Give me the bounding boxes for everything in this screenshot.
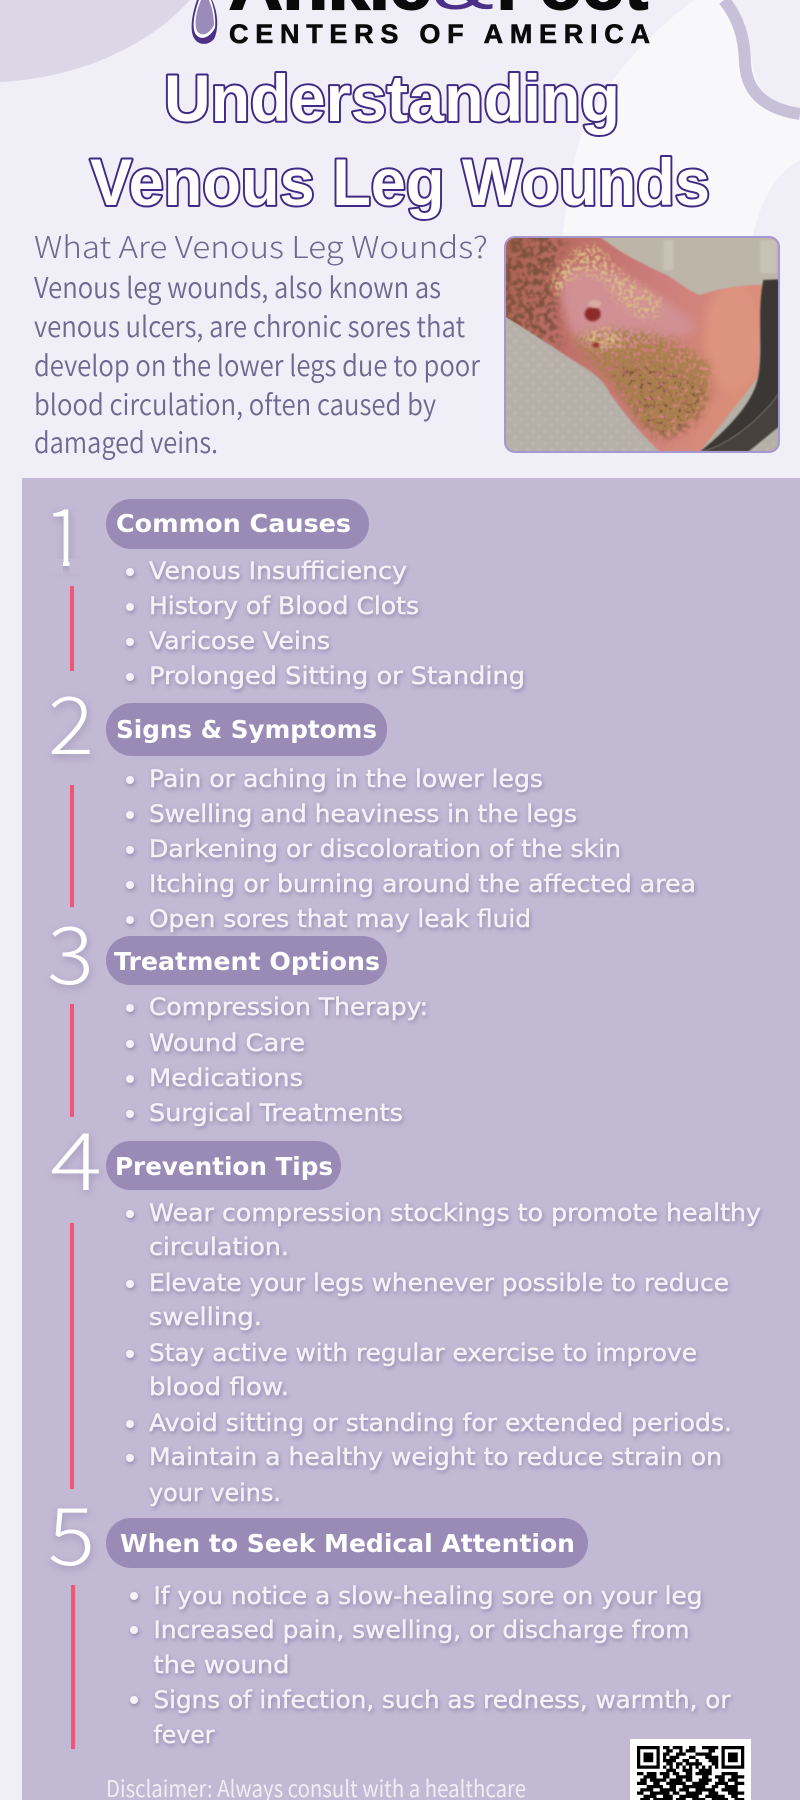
photo: venous ulcer on lower leg xyxy=(500,230,780,453)
logo wordmark xyxy=(229,0,650,49)
list 4: swelling. xyxy=(149,1303,262,1331)
title: Venous Leg Wounds xyxy=(90,145,710,219)
list 4 xyxy=(126,1199,761,1507)
list 2: Itching or burning around the affected area xyxy=(149,870,696,898)
section 4: prevention tips xyxy=(50,1098,761,1507)
list 4: Wear compression stockings to promote healthy xyxy=(149,1199,761,1227)
list 4: circulation. xyxy=(149,1233,289,1261)
shoe xyxy=(700,279,779,452)
list 1: Varicose Veins xyxy=(149,627,330,655)
list 3: Surgical Treatments xyxy=(149,1099,403,1127)
title: Understanding xyxy=(164,61,620,135)
list 4: Avoid sitting or standing for extended periods. xyxy=(149,1409,732,1437)
intro paragraph: venous ulcers, are chronic sores that xyxy=(34,305,465,346)
wound xyxy=(585,307,601,321)
list 3: Wound Care xyxy=(149,1029,305,1057)
list 5: fever xyxy=(154,1721,215,1749)
list 5 xyxy=(130,1582,731,1749)
section 3: treatment options xyxy=(47,892,428,1127)
connector line 2 xyxy=(70,785,74,907)
number 1: 1 xyxy=(43,474,86,590)
list 3: Compression Therapy: xyxy=(149,993,428,1021)
number 3: 3 xyxy=(47,892,94,1008)
intro paragraph xyxy=(34,266,480,462)
heading pill 5: When to Seek Medical Attention xyxy=(120,1529,575,1558)
logo xyxy=(192,0,650,49)
section 5: when to seek medical attention xyxy=(48,1473,731,1749)
decorative background shapes xyxy=(0,0,800,240)
list 4: your veins. xyxy=(149,1479,281,1507)
intro paragraph: blood circulation, often caused by xyxy=(34,383,436,424)
heading pill 3 xyxy=(106,936,387,985)
number 5: 5 xyxy=(48,1473,95,1589)
list 1: History of Blood Clots xyxy=(149,592,419,620)
list 2 xyxy=(126,765,696,933)
list 4: blood flow. xyxy=(149,1373,289,1401)
list 5: Signs of infection, such as redness, warmth, or xyxy=(154,1686,731,1714)
list 2: Swelling and heaviness in the legs xyxy=(149,800,577,828)
heading pill 1 xyxy=(106,499,369,549)
list 4: Stay active with regular exercise to improve xyxy=(149,1339,697,1367)
list 5: the wound xyxy=(154,1651,290,1679)
heading pill 2 xyxy=(106,703,387,756)
section 2: signs and symptoms xyxy=(48,662,696,933)
connector line 5 xyxy=(71,1585,75,1749)
dark speckle texture xyxy=(506,238,568,348)
heading pill 5 xyxy=(106,1518,588,1568)
icon: logo foot mark xyxy=(192,0,217,44)
leg shape xyxy=(506,237,763,452)
heading pill 4: Prevention Tips xyxy=(115,1152,333,1181)
heading pill 4 xyxy=(106,1141,341,1190)
heading pill 2: Signs & Symptoms xyxy=(116,715,377,744)
list 2: Pain or aching in the lower legs xyxy=(149,765,543,793)
pale crust texture xyxy=(550,245,662,320)
list 2: Open sores that may leak fluid xyxy=(149,905,531,933)
title xyxy=(90,61,710,219)
intro heading: What Are Venous Leg Wounds? xyxy=(34,223,488,267)
connector line 3 xyxy=(70,1004,74,1117)
list 1: Venous Insufficiency xyxy=(149,557,407,585)
intro paragraph: develop on the lower legs due to poor xyxy=(34,344,480,385)
logo wordmark: CENTERS OF AMERICA xyxy=(229,19,650,49)
list 4: Maintain a healthy weight to reduce strain on xyxy=(149,1443,722,1471)
heading pill 1: Common Causes xyxy=(116,509,351,538)
number 4: 4 xyxy=(50,1098,102,1214)
brown crust texture xyxy=(570,329,708,433)
list 2: Darkening or discoloration of the skin xyxy=(149,835,621,863)
list 5: If you notice a slow-healing sore on your leg xyxy=(154,1582,702,1610)
intro paragraph: damaged veins. xyxy=(34,421,218,462)
QR code xyxy=(630,1739,751,1800)
connector line 1 xyxy=(70,586,74,671)
panel: main content xyxy=(22,478,800,1800)
connector line 4 xyxy=(70,1223,74,1489)
list 4: Elevate your legs whenever possible to reduce xyxy=(149,1269,729,1297)
intro paragraph: Venous leg wounds, also known as xyxy=(34,266,441,307)
list 5: Increased pain, swelling, or discharge from xyxy=(154,1616,690,1644)
list 1: Prolonged Sitting or Standing xyxy=(149,662,525,690)
list 1 xyxy=(126,557,525,690)
section 1: common causes xyxy=(36,474,525,690)
number 2: 2 xyxy=(48,662,94,778)
list 3 xyxy=(126,993,428,1127)
list 3: Medications xyxy=(149,1064,303,1092)
heading pill 3: Treatment Options xyxy=(114,947,380,976)
